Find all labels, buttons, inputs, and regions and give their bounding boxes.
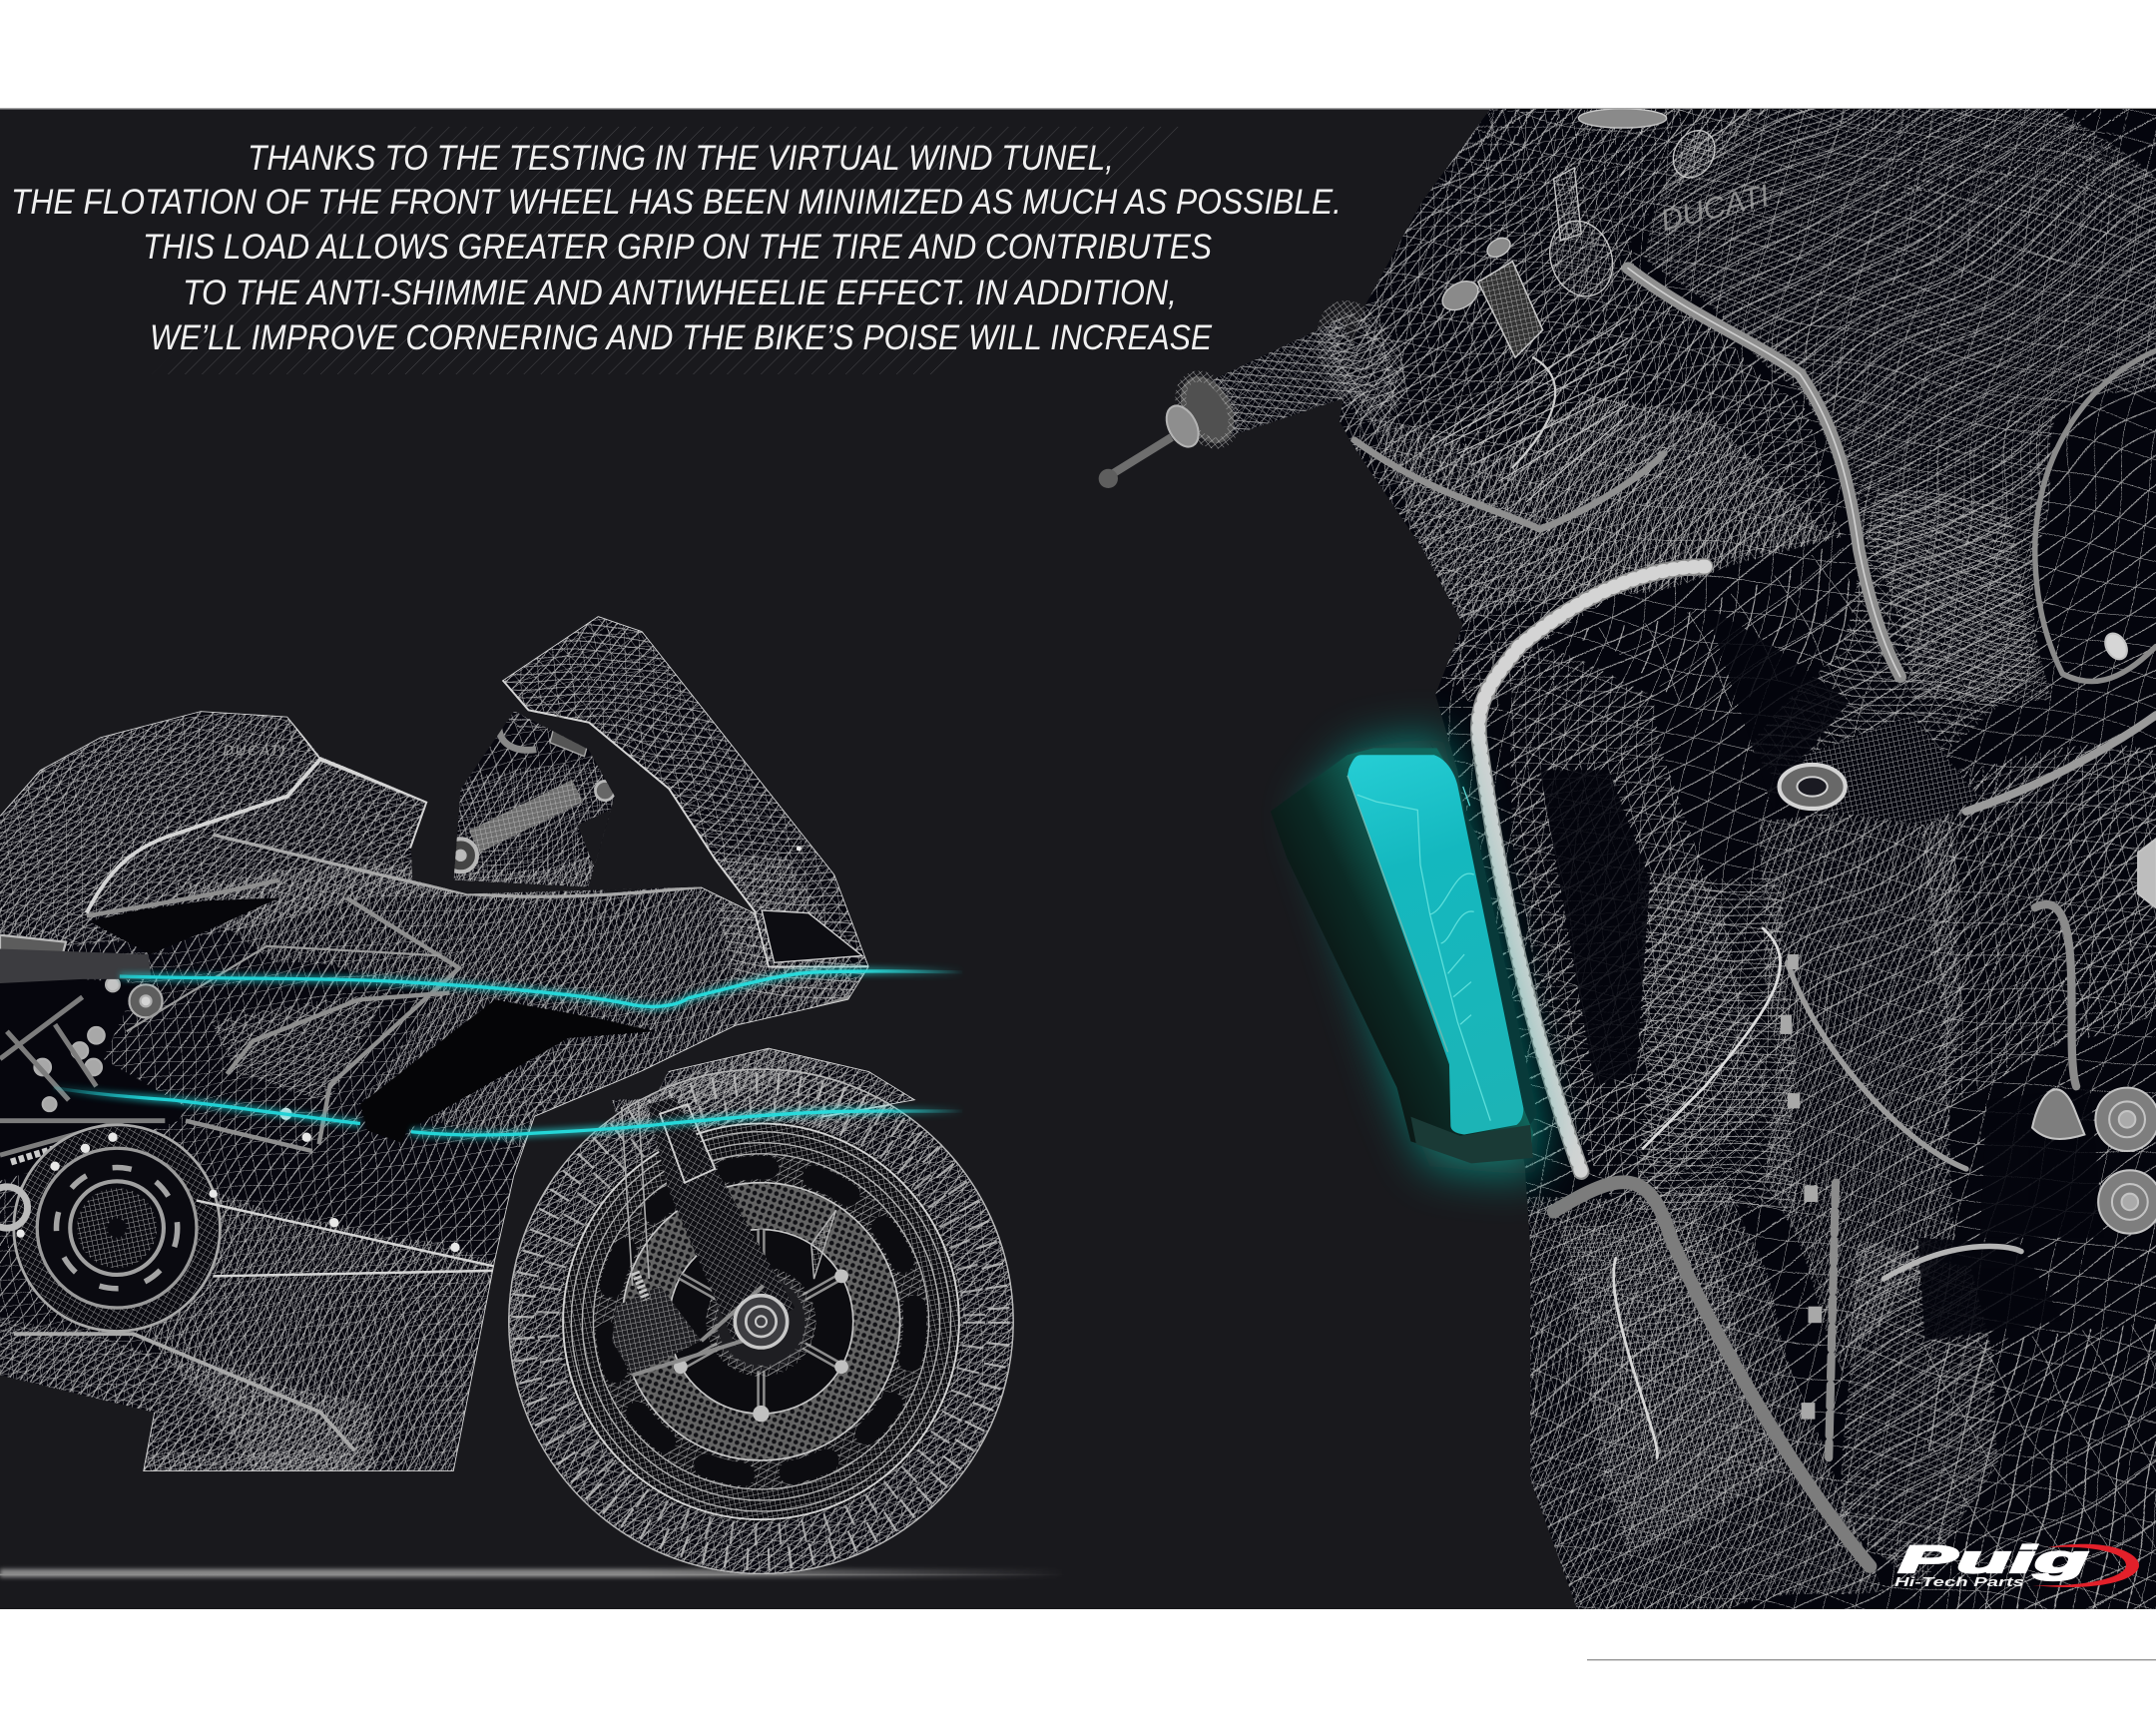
panel top edge — [0, 108, 2156, 110]
wheel hub — [735, 1296, 788, 1348]
aero winglet highlighted — [1271, 736, 1540, 1176]
tank lettering: DUCATI — [1658, 179, 1773, 238]
winglet lower lip — [1410, 1117, 1533, 1163]
winglet cyan face — [1348, 755, 1523, 1134]
airflow lines — [54, 971, 962, 1135]
wheel rim holes — [607, 1168, 915, 1475]
winglet face edge — [1348, 776, 1448, 1052]
headlight — [762, 910, 862, 962]
cockpit opening — [577, 811, 652, 893]
bottom hairline — [1587, 1659, 2156, 1661]
bar grip — [1099, 301, 1408, 488]
logo tagline: Hi-Tech Parts — [1894, 1575, 2024, 1589]
fan of lines below clamp — [1430, 319, 1628, 502]
black pocket under tank — [90, 898, 279, 954]
intro text block: THANKS TO THE TESTING IN THE VIRTUAL WIND TUNEL, — [248, 139, 1114, 178]
logo red swoosh — [2032, 1544, 2139, 1587]
dark gaps in wireframe — [1540, 605, 2104, 1341]
fairing bolts — [17, 846, 802, 1252]
handlebar group — [444, 713, 615, 871]
bolts column — [1781, 954, 1822, 1420]
intro text block: THIS LOAD ALLOWS GREATER GRIP ON THE TIRE AND CONTRIBUTES — [143, 228, 1212, 267]
bright edge lines — [0, 616, 915, 1471]
diagonal hatch behind text — [140, 120, 1198, 379]
winglet surface contours — [1357, 787, 1490, 1121]
intro text block — [11, 139, 1342, 357]
close-up mesh surfaces — [1293, 55, 2156, 1678]
brake caliper — [612, 1272, 764, 1376]
thick fairing bands — [87, 880, 855, 1151]
brake rotors at right — [2032, 630, 2156, 1234]
clutch cover — [0, 1125, 220, 1331]
clamp and lever details — [1437, 109, 1723, 357]
winglet body — [1271, 748, 1533, 1161]
wireframe motorcycle side view — [0, 591, 1059, 1609]
wheel interior cutout — [560, 1121, 962, 1522]
dark mesh teal strip — [1430, 743, 1537, 1141]
belly vents — [0, 1398, 107, 1450]
belly pan strip — [143, 1452, 354, 1471]
engine parts — [0, 935, 165, 1162]
logo wordmark: Puig — [1898, 1539, 2088, 1581]
wireframe close-up of fairing — [1099, 55, 2156, 1678]
black winglet on fairing — [360, 999, 655, 1143]
intro text block: THE FLOTATION OF THE FRONT WHEEL HAS BEEN MINIMIZED AS MUCH AS POSSIBLE. — [11, 183, 1342, 222]
bike mesh surfaces — [0, 591, 1059, 1609]
winglet glow — [1307, 736, 1540, 1176]
brake disc — [622, 1183, 900, 1460]
engine bay dark area — [0, 962, 186, 1183]
brand logo — [1894, 1539, 2139, 1589]
disc bolts — [674, 1269, 848, 1422]
rim rings — [563, 1123, 959, 1519]
intro text block: TO THE ANTI-SHIMMIE AND ANTIWHEELIE EFFECT. IN ADDITION, — [183, 274, 1177, 312]
ground light line — [0, 1569, 1066, 1577]
frame slider — [1780, 715, 1980, 826]
fork leg — [622, 1097, 836, 1347]
front tyre tread — [509, 1069, 1013, 1574]
bright frame bands — [1354, 269, 2156, 1566]
intro text block: WE’LL IMPROVE CORNERING AND THE BIKE’S POISE WILL INCREASE — [150, 318, 1213, 357]
tank logo: DUCATI — [223, 742, 286, 759]
